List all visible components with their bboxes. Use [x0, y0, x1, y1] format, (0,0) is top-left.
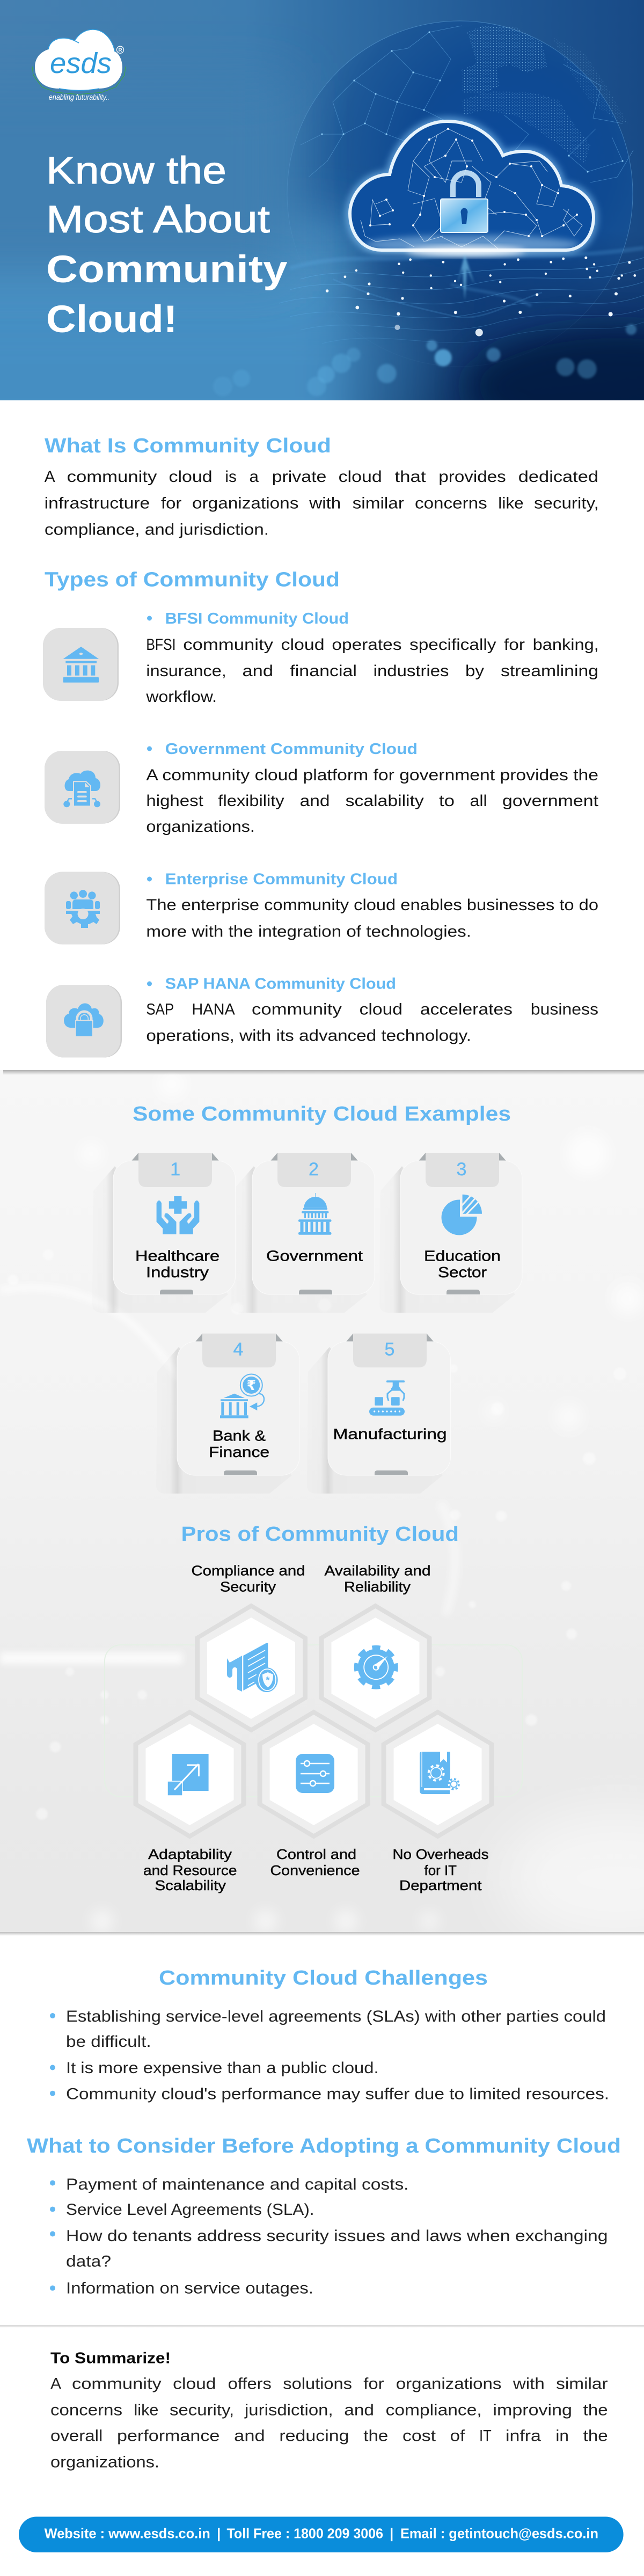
title: Most About: [46, 199, 270, 241]
description: accelerates: [420, 1000, 513, 1019]
paragraph: and: [344, 2402, 374, 2419]
hero banner: [0, 0, 644, 400]
description: operates: [332, 636, 401, 654]
paragraph: for: [363, 2375, 384, 2393]
section: pros of community cloud: [133, 1523, 494, 1893]
card 5: manufacturing: Manufacturing: [333, 1426, 447, 1443]
paragraph: with: [513, 2375, 545, 2393]
card 4: bank and finance: 4: [233, 1340, 243, 1360]
paragraph: is: [225, 468, 237, 486]
label: adaptability: Scalability: [155, 1877, 226, 1893]
card 3: education: 3: [457, 1159, 466, 1180]
description: scalability: [346, 792, 424, 810]
paragraph: jurisdiction,: [244, 2402, 333, 2419]
label: availability and reliability: [324, 1563, 430, 1595]
paragraph: offers: [228, 2375, 272, 2393]
paragraph: compliance,: [386, 2402, 482, 2419]
description: community: [183, 636, 273, 654]
card 4: bank and finance: [177, 1334, 299, 1475]
icon: capitol: [298, 1193, 332, 1235]
heading: Some Community Cloud Examples: [133, 1103, 511, 1125]
divider shadow: [0, 2325, 644, 2328]
title: Know the: [46, 150, 226, 192]
section: what is community cloud: [45, 435, 599, 539]
paragraph: that: [394, 468, 426, 486]
card 3: education: Education: [424, 1247, 501, 1264]
label: compliance and security: Compliance and: [191, 1563, 305, 1579]
label: availability and reliability: Reliability: [344, 1579, 411, 1595]
label: compliance and security: [191, 1563, 305, 1595]
card 5: manufacturing: 5: [385, 1340, 394, 1360]
data wave mesh: [279, 248, 644, 343]
bokeh lights: [213, 324, 636, 396]
label: control: Convenience: [270, 1862, 360, 1878]
section: what to consider: [27, 2135, 621, 2297]
paragraph: solutions: [283, 2375, 352, 2393]
label: compliance and security: Security: [220, 1579, 276, 1595]
connector frame behind hexagons: [105, 1645, 522, 1797]
logo: esds: esds: [50, 47, 112, 79]
paragraph: IT: [479, 2427, 491, 2445]
icon: hands with cross: [157, 1196, 199, 1234]
label: no overheads: for IT: [424, 1862, 457, 1878]
hexagon: availability: [319, 1604, 431, 1732]
description: and: [243, 662, 273, 680]
card 2: government: [252, 1153, 375, 1294]
description: government: [502, 792, 599, 810]
data wave dots: [326, 257, 636, 336]
paragraph: cost: [402, 2427, 436, 2445]
description: insurance,: [146, 662, 226, 680]
card 3: education: Sector: [438, 1264, 487, 1280]
label: adaptability: Adaptability: [148, 1846, 232, 1862]
list: [50, 2008, 609, 2103]
footer contact bar: Email : getintouch@esds.co.in: [400, 2526, 598, 2542]
paragraph: private: [272, 468, 326, 486]
list: It is more expensive than a public cloud.: [66, 2059, 379, 2077]
paragraph: concerns: [50, 2402, 122, 2419]
icon: cloud document: [45, 751, 120, 824]
heading: Community Cloud Challenges: [159, 1967, 488, 1989]
paragraph: infrastructure: [45, 495, 150, 512]
icon: gear gauge: [356, 1648, 396, 1687]
bullet heading: Enterprise Community Cloud: [165, 870, 398, 888]
description: financial: [290, 662, 357, 680]
icon: team gear: [45, 872, 120, 945]
description: and: [300, 792, 330, 810]
label: control: [270, 1846, 360, 1878]
description: to: [439, 792, 455, 810]
label: adaptability: and Resource: [143, 1862, 237, 1878]
paragraph: provides: [438, 468, 506, 486]
type: BFSI: [43, 610, 599, 706]
description: highest: [146, 792, 204, 810]
paragraph: infra: [506, 2427, 541, 2445]
paragraph: like: [134, 2402, 158, 2419]
lower dark water and left fade: [0, 133, 644, 400]
paragraph: and: [234, 2427, 265, 2445]
grey background panel: [0, 1070, 644, 1948]
description: business: [531, 1000, 598, 1019]
paragraph: cloud: [339, 468, 382, 486]
description: for: [504, 636, 525, 654]
label: no overheads: No Overheads: [393, 1846, 488, 1862]
globe: [287, 21, 633, 367]
icon: document and shield: [227, 1643, 278, 1692]
bullet heading: SAP HANA Community Cloud: [165, 976, 396, 993]
paragraph: a: [249, 468, 259, 486]
paragraph: cloud: [173, 2375, 216, 2393]
icon: book and gears: [420, 1752, 460, 1794]
card 3: education: [400, 1153, 522, 1294]
title: [46, 150, 288, 341]
type: SAP HANA: [46, 976, 598, 1057]
description: more with the integration of technologies.: [146, 923, 471, 940]
type: government: [45, 741, 599, 836]
paragraph: organizations: [396, 2375, 501, 2393]
footer contact bar: |: [390, 2526, 393, 2542]
label: availability and reliability: Availability and: [324, 1563, 430, 1579]
paragraph: reducing: [279, 2427, 349, 2445]
hexagon: compliance: [195, 1604, 308, 1732]
heading: Pros of Community Cloud: [181, 1523, 459, 1546]
paragraph: organizations: [192, 495, 298, 512]
description: cloud: [281, 636, 325, 654]
logo: esds: [32, 30, 126, 102]
paragraph: organizations.: [50, 2454, 159, 2471]
paragraph: cloud: [169, 468, 213, 486]
footer contact bar: |: [217, 2526, 221, 2542]
description: [146, 1000, 598, 1044]
paragraph: performance: [117, 2427, 219, 2445]
list: Establishing service-level agreements (SLAs) with other parties could: [66, 2008, 606, 2025]
paragraph: [45, 468, 599, 539]
card 1: healthcare: [113, 1153, 235, 1294]
paragraph: overall: [50, 2427, 103, 2445]
icon: document and shield: *: [266, 1675, 270, 1686]
paragraph: for: [161, 495, 181, 512]
card 2: government: 2: [309, 1159, 319, 1180]
description: SAP: [146, 1000, 174, 1019]
list: Service Level Agreements (SLA).: [66, 2201, 314, 2219]
paragraph: community: [72, 2375, 162, 2393]
paragraph: the: [363, 2427, 388, 2445]
paragraph: community: [67, 468, 157, 486]
icon: bank: [43, 628, 119, 701]
paragraph: improving: [493, 2402, 572, 2419]
card 2: government: Government: [266, 1247, 363, 1264]
paragraph: A: [45, 468, 55, 486]
icon: pie chart: [442, 1195, 482, 1235]
paragraph: concerns: [415, 495, 487, 512]
description: HANA: [192, 1000, 235, 1019]
footer contact bar: [19, 2517, 624, 2552]
card 1: healthcare: 1: [170, 1159, 180, 1180]
logo: esds: R: [118, 47, 122, 54]
icon: bank and rupee: [220, 1374, 264, 1418]
description: flexibility: [218, 792, 284, 810]
description: by: [465, 662, 484, 680]
label: no overheads: [393, 1846, 488, 1893]
paragraph: security,: [170, 2402, 234, 2419]
paragraph: similar: [353, 495, 404, 512]
heading: To Summarize!: [50, 2350, 171, 2367]
card 4: bank and finance: Finance: [209, 1444, 269, 1460]
description: [145, 636, 599, 706]
paragraph: security,: [534, 495, 599, 512]
footer contact bar: Website : www.esds.co.in: [45, 2526, 210, 2542]
card shadows: [92, 1166, 515, 1494]
logo: esds: enabling futurability..: [49, 93, 109, 102]
title: Cloud!: [46, 298, 177, 341]
paragraph: [50, 2375, 608, 2471]
title: Community: [46, 248, 288, 291]
list: Information on service outages.: [66, 2279, 313, 2297]
section: to summarize: [50, 2350, 608, 2471]
paragraph: like: [498, 495, 524, 512]
type: enterprise: [45, 870, 598, 945]
description: workflow.: [145, 688, 217, 706]
description: The enterprise community cloud enables businesses to do: [146, 896, 598, 914]
list: data?: [66, 2253, 111, 2271]
icon: bank and rupee: ₹: [247, 1378, 256, 1393]
footer contact bar: Toll Free : 1800 209 3006: [226, 2526, 383, 2542]
list: [50, 2176, 608, 2297]
paragraph: compliance, and jurisdiction.: [45, 521, 269, 539]
shadow under top white panel: [3, 1070, 644, 1075]
card 1: healthcare: Healthcare: [135, 1247, 219, 1264]
description: [146, 766, 599, 836]
label: no overheads: Department: [399, 1877, 482, 1893]
heading: What to Consider Before Adopting a Community Cloud: [27, 2135, 621, 2157]
card 5: manufacturing: [328, 1334, 451, 1475]
bullet heading: BFSI Community Cloud: [165, 610, 349, 627]
card 1: healthcare: Industry: [146, 1264, 209, 1280]
list: How do tenants address security issues and laws when exchanging: [66, 2227, 608, 2245]
section: types of community cloud: [43, 569, 599, 1057]
paragraph: dedicated: [518, 468, 598, 486]
list: Community cloud's performance may suffer due to limited resources.: [66, 2085, 609, 2103]
list: Payment of maintenance and capital costs.: [66, 2176, 409, 2193]
label: adaptability: [143, 1846, 237, 1893]
paragraph: the: [583, 2402, 608, 2419]
description: organizations.: [146, 818, 255, 836]
icon: sliders: [296, 1754, 334, 1793]
heading: What Is Community Cloud: [45, 435, 331, 457]
description: banking,: [533, 636, 599, 654]
description: streamlining: [501, 662, 598, 680]
description: all: [470, 792, 487, 810]
paragraph: in: [555, 2427, 569, 2445]
shadow above challenges panel: [0, 1932, 644, 1936]
paragraph: A: [50, 2375, 61, 2393]
hexagon: no overheads: [382, 1710, 494, 1839]
icon: scale arrow: [167, 1754, 209, 1796]
description: community: [252, 1000, 342, 1019]
description: operations, with its advanced technology.: [146, 1027, 471, 1044]
bullet heading: Government Community Cloud: [165, 741, 418, 758]
paragraph: the: [583, 2427, 608, 2445]
hexagon: adaptability: [133, 1710, 246, 1839]
heading: Types of Community Cloud: [45, 569, 340, 591]
section: some community cloud examples: [92, 1103, 522, 1494]
glowing cloud with padlock: [350, 121, 594, 301]
paragraph: with: [309, 495, 341, 512]
description: industries: [374, 662, 449, 680]
paragraph: of: [450, 2427, 465, 2445]
icon: cloud lock: [46, 985, 122, 1057]
description: A community cloud platform for government provides the: [146, 766, 598, 784]
description: cloud: [360, 1000, 402, 1019]
hexagon: control: [258, 1710, 370, 1839]
section: challenges: [50, 1967, 609, 2103]
label: control: Control and: [276, 1846, 356, 1862]
card 4: bank and finance: Bank &: [213, 1428, 266, 1444]
description: specifically: [409, 636, 496, 654]
description: BFSI: [146, 636, 176, 654]
paragraph: similar: [556, 2375, 608, 2393]
icon: robot arm conveyor: [369, 1380, 405, 1416]
list: be difficult.: [66, 2033, 151, 2051]
description: [146, 896, 598, 940]
